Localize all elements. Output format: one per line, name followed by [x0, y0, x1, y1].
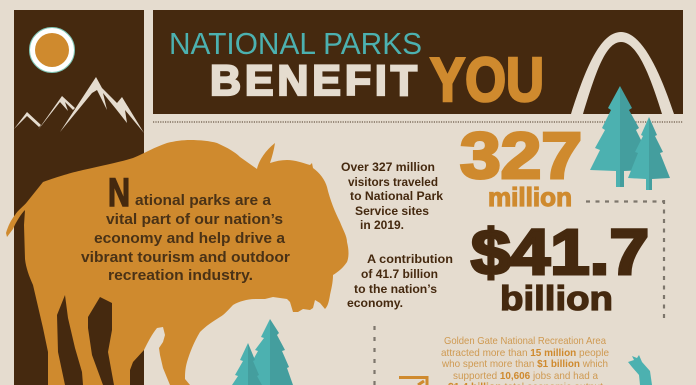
stat: 41.7 billion: $41.7: [471, 216, 649, 288]
title line: National Parks: NATIONAL PARKS: [169, 26, 422, 61]
text block: contribution: of 41.7 billion: [361, 267, 438, 281]
text block: contribution: [347, 252, 453, 310]
divider dotted line: [153, 121, 683, 123]
intro lines: vital part of our nation’s: [106, 212, 283, 228]
stat: 41.7 billion: billion: [500, 280, 613, 318]
text block: visitors: [341, 160, 443, 232]
intro lines: [81, 193, 290, 284]
connector dashes left: [373, 326, 376, 385]
icon: sun: [30, 28, 74, 72]
connector dashes right: [586, 200, 664, 320]
title line: You: YOU: [430, 46, 544, 115]
drop cap: N: [108, 171, 130, 215]
text block: Golden Gate: [441, 335, 609, 385]
panel: title banner: [153, 10, 683, 114]
icon: gateway arch: [571, 32, 674, 114]
text block: contribution: to the nation’s: [354, 282, 437, 296]
text block: Golden Gate: attracted more than 15 million people: [441, 347, 609, 359]
text block: visitors: visitors traveled: [348, 175, 438, 189]
intro lines: economy and help drive a: [94, 231, 286, 247]
icon: lower trees: [232, 319, 293, 385]
icon: tall tree: [590, 86, 650, 187]
icon: orange bracket: [399, 378, 427, 385]
intro lines: recreation industry.: [108, 268, 253, 284]
icon: teal bird wing: [628, 355, 652, 385]
bison leg gap: middle: [88, 297, 114, 385]
icon: small tree: [628, 117, 670, 190]
stat: 327 million: million: [488, 182, 572, 212]
text block: Golden Gate: supported 10,606 jobs and had a: [453, 370, 598, 382]
title: [169, 26, 544, 115]
text block: contribution: A contribution: [367, 252, 453, 266]
intro lines: vibrant tourism and outdoor: [81, 250, 290, 266]
stat: 327 million: 327: [460, 119, 582, 192]
stat: 41.7 billion: [471, 216, 649, 318]
text block: Golden Gate: who spent more than $1 billion which: [441, 358, 608, 370]
bison leg gap: rear: [57, 295, 83, 385]
text block: contribution: economy.: [347, 296, 403, 310]
intro lines: ational parks are a: [135, 193, 272, 209]
text block: visitors: Over 327 million: [341, 160, 435, 174]
text block: visitors: in 2019.: [360, 218, 404, 232]
text block: visitors: Service sites: [355, 204, 429, 218]
text block: Golden Gate: Golden Gate National Recreation Area: [444, 335, 606, 347]
panel: left brown column: [14, 10, 144, 385]
icon: mountains: [14, 77, 144, 133]
title line: Benefit: BENEFIT: [210, 57, 417, 105]
text block: visitors: to National Park: [350, 189, 443, 203]
stat: 327 million: [460, 119, 582, 212]
icon: bison silhouette: [6, 140, 348, 385]
text block: bison intro: [81, 171, 290, 284]
